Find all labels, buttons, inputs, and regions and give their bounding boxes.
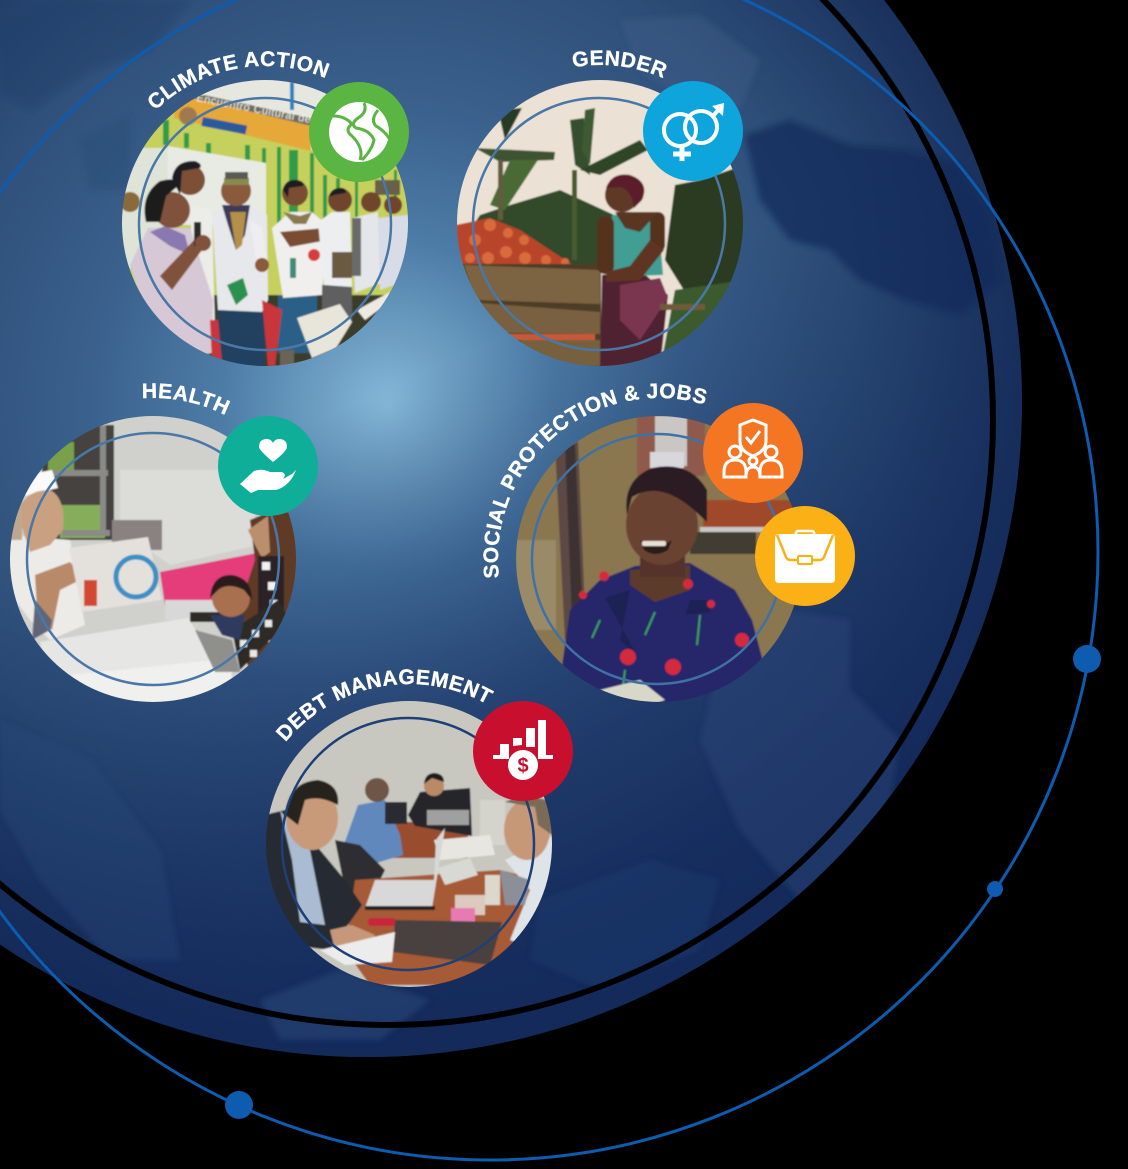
ring overlay — [532, 434, 782, 684]
icon: shield and family — [703, 403, 803, 503]
black orbit ring — [0, 0, 993, 1025]
icon: earth — [309, 82, 409, 182]
crate — [455, 264, 601, 370]
body dress — [560, 563, 770, 710]
ring overlay — [473, 98, 725, 350]
panel: debt management — [266, 669, 573, 987]
panel: climate action — [122, 51, 409, 366]
shelves — [42, 425, 114, 540]
heading: gender: GENDER — [572, 50, 666, 78]
photo: health worker with chart — [8, 414, 298, 706]
woman right — [239, 512, 296, 666]
photo: woman with tomatoes — [455, 78, 745, 370]
photo: smiling woman — [514, 414, 804, 710]
icon: bars and dollar coin: $ — [517, 755, 529, 777]
icon: heart in hand — [218, 416, 318, 516]
chart — [69, 537, 162, 612]
folder — [393, 920, 502, 965]
back desk — [390, 822, 468, 858]
child — [189, 611, 224, 623]
man four — [278, 295, 317, 353]
icon: bars and dollar coin — [473, 701, 573, 801]
left man — [264, 810, 362, 950]
woman — [600, 270, 668, 370]
ring overlay — [27, 433, 279, 685]
red chairs — [262, 300, 282, 366]
red cable device — [368, 918, 396, 926]
foliage — [476, 189, 614, 266]
table — [345, 870, 540, 985]
icon: gender symbols — [643, 81, 743, 181]
man six — [352, 212, 380, 293]
nurse — [8, 535, 85, 640]
pink bed — [159, 552, 256, 605]
tomatoes — [456, 218, 578, 268]
heading: social protection and jobs: SOCIAL PROTECTION & JOBS — [483, 383, 707, 578]
papers and phone — [434, 835, 495, 860]
head — [639, 556, 686, 576]
right man — [505, 835, 560, 945]
man behind — [190, 224, 216, 322]
photo: community speakers — [120, 78, 410, 370]
orbit dots — [225, 645, 1101, 1119]
woman speaker — [130, 228, 213, 360]
heading: debt management: DEBT MANAGEMENT — [275, 669, 494, 742]
white book — [40, 618, 210, 680]
ring overlay — [282, 718, 534, 970]
panel: social protection and jobs — [483, 383, 855, 702]
photo: community speakers: Encuentro Cultural del — [195, 92, 315, 127]
back man — [408, 788, 472, 836]
panel: gender — [457, 50, 743, 366]
man seven — [378, 215, 408, 290]
panel: health — [10, 383, 318, 702]
heading: climate action: CLIMATE ACTION — [148, 51, 330, 108]
blue shirt man — [342, 800, 403, 866]
ring overlay — [139, 98, 391, 350]
world map continents — [0, 0, 1000, 1040]
laptop — [365, 828, 445, 908]
white chairs — [297, 304, 352, 358]
icon: briefcase — [755, 506, 855, 606]
man five — [322, 285, 352, 323]
man center — [218, 308, 265, 368]
heading: health: HEALTH — [142, 383, 230, 415]
photo: officials at desks — [262, 698, 560, 990]
